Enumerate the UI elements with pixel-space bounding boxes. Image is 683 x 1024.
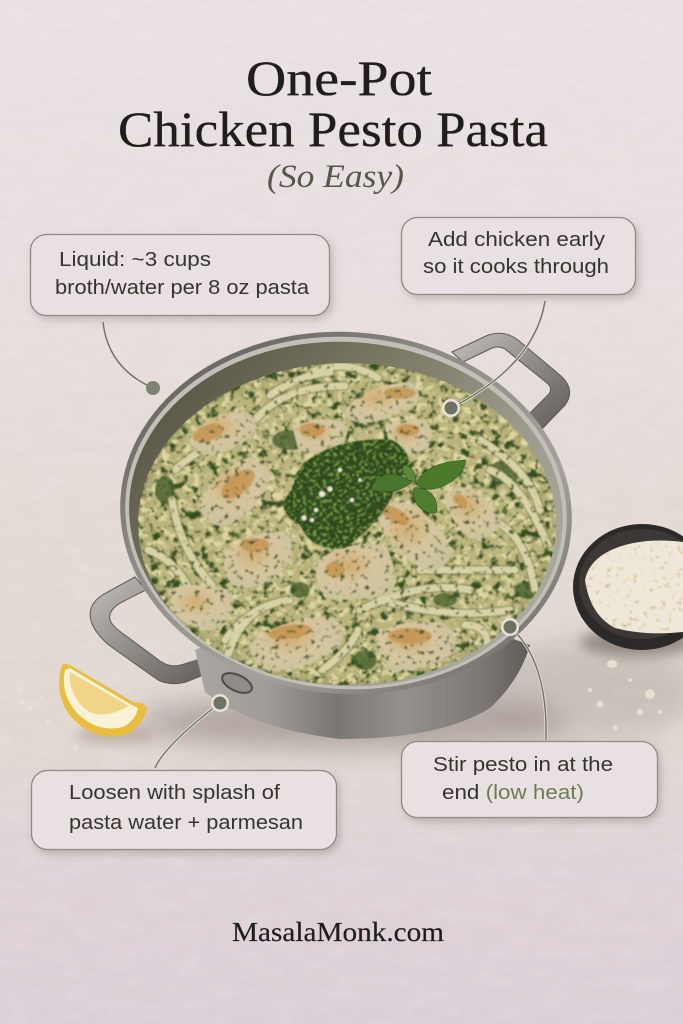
- callout: loosen: [32, 770, 336, 850]
- subtitle: (So Easy): [267, 159, 404, 195]
- lemon wedge: [59, 664, 155, 744]
- pesto mound: [284, 439, 409, 549]
- pot body: [195, 580, 530, 739]
- inner wall: [117, 327, 574, 701]
- right handle: [452, 333, 570, 430]
- chicken pieces: [168, 382, 502, 672]
- left handle: [90, 577, 216, 684]
- bowl of parmesan: [573, 524, 683, 656]
- food base: [130, 355, 560, 690]
- footer: MasalaMonk.com: [232, 917, 444, 947]
- title: Chicken Pesto Pasta: [118, 101, 548, 157]
- parmesan on pesto: [302, 468, 362, 522]
- leader: stir pesto: [501, 618, 546, 740]
- title: One-Pot: [246, 50, 432, 106]
- basil leaves: [371, 460, 466, 513]
- illustration: pot of chicken pesto pasta: [90, 317, 584, 748]
- handle rivet: [219, 669, 255, 697]
- pot shadow: [135, 696, 565, 748]
- crumbs: [18, 660, 662, 750]
- callout: chicken: [402, 218, 636, 294]
- browned sear marks: [190, 387, 469, 644]
- callout: liquid: broth/water per 8 oz pasta: [55, 276, 310, 299]
- herb flecks: [130, 355, 560, 690]
- callout: loosen: pasta water + parmesan: [69, 811, 303, 834]
- callout: liquid: [30, 234, 330, 316]
- callout: liquid: Liquid: ~3 cups: [59, 248, 211, 271]
- callout: chicken: so it cooks through: [423, 255, 609, 278]
- callout: chicken: Add chicken early: [428, 228, 606, 251]
- title: [118, 50, 548, 157]
- leader: liquid: [103, 322, 160, 395]
- pasta strands: [148, 366, 548, 670]
- leader: chicken: [442, 301, 545, 417]
- callout: loosen: Loosen with splash of: [69, 781, 280, 804]
- callout: stir pesto: Stir pesto in at the: [433, 753, 613, 776]
- leader: loosen: [155, 694, 229, 768]
- callout: stir pesto: [402, 742, 658, 818]
- green patches: [155, 430, 542, 670]
- pot rim: [108, 317, 584, 709]
- callout: stir pesto: end (low heat): [442, 781, 584, 804]
